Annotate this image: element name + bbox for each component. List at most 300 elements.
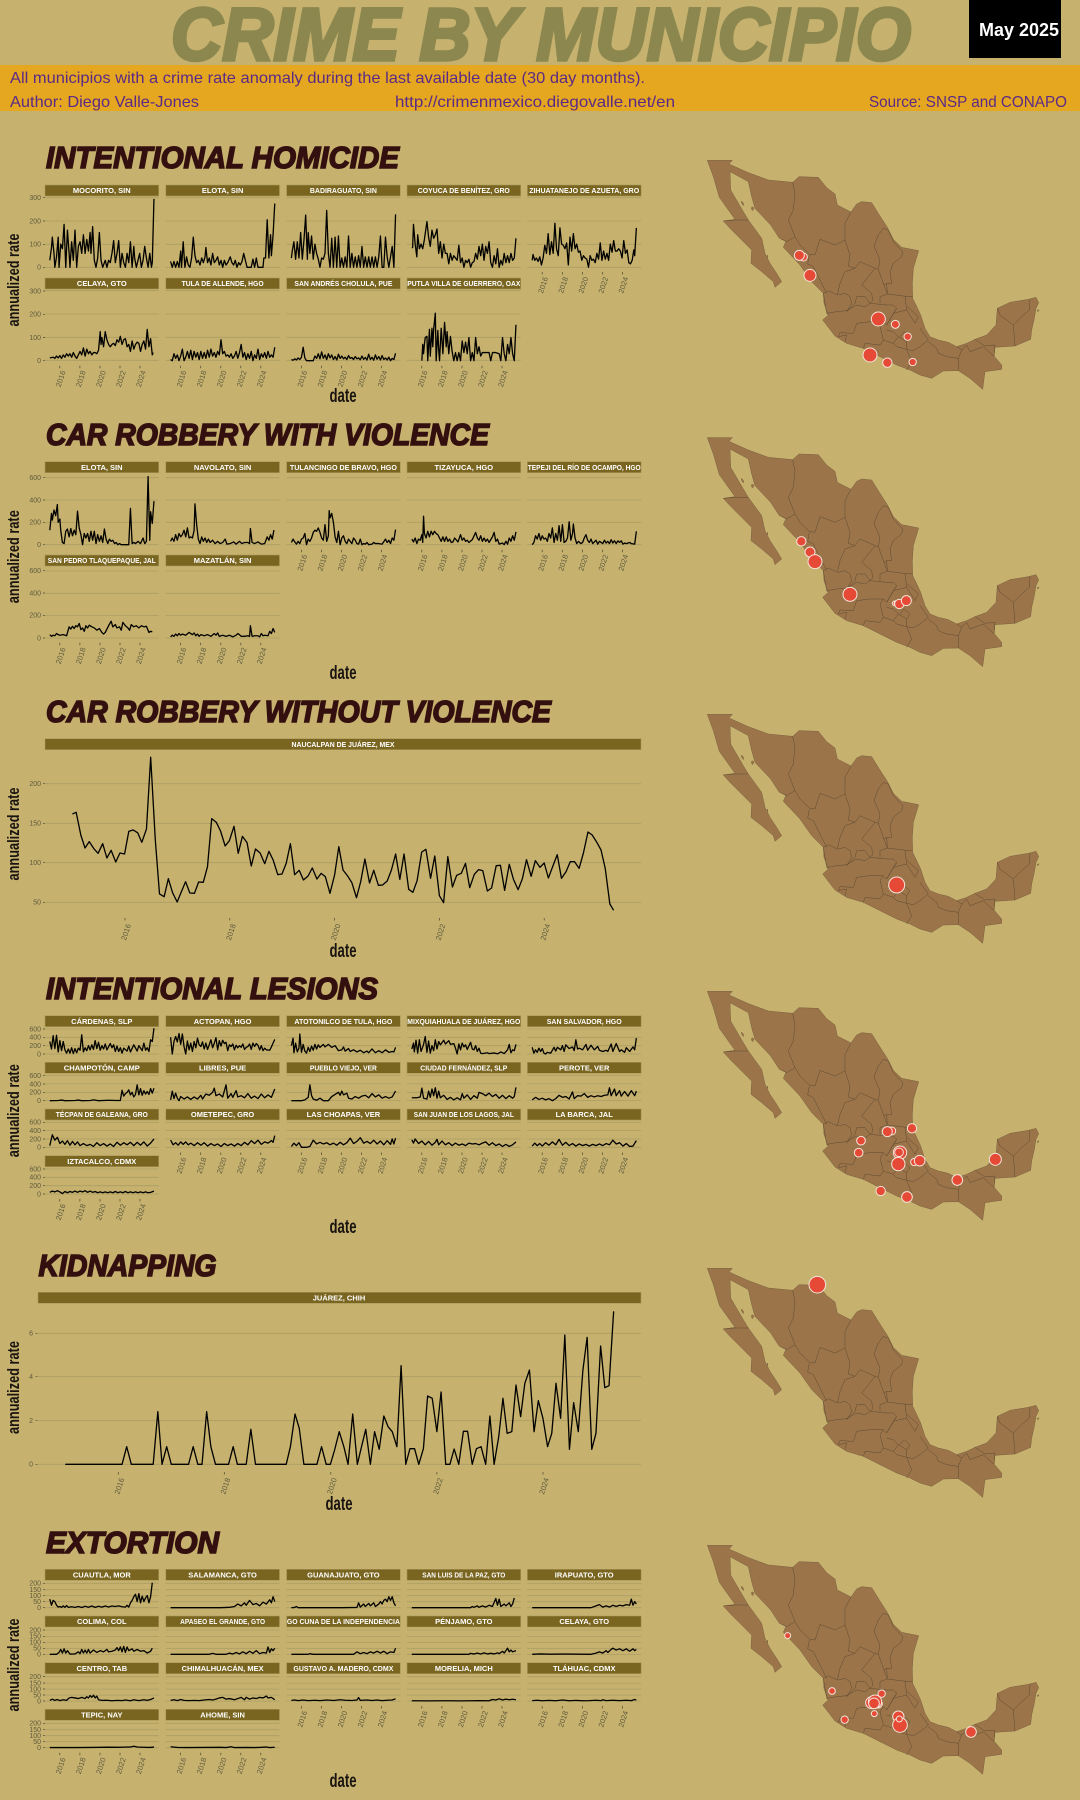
x axes: row 3 free facets: 2022 <box>476 1710 490 1728</box>
y axis labels: 400 <box>29 1128 41 1135</box>
x axis: 2024 <box>134 1203 148 1221</box>
y axis labels: 0 <box>37 1145 41 1152</box>
y axis labels: 100 <box>29 1640 41 1647</box>
panel: extortion <box>4 1525 641 1792</box>
x axis title: date <box>330 941 356 962</box>
facet: Cuautla <box>45 1569 159 1608</box>
facet: Ciudad Fernández <box>407 1062 521 1101</box>
y axis labels: 50 <box>33 1599 41 1606</box>
y axis labels: 150 <box>29 1727 41 1734</box>
x axis: 2022 <box>476 553 490 572</box>
facet: Salamanca <box>166 1569 280 1608</box>
facet: Celaya: CELAYA, GTO <box>77 279 127 288</box>
facet: Ciudad Fernández: CIUDAD FERNÁNDEZ, SLP <box>420 1064 507 1073</box>
facet: Técpan de Galeana <box>45 1109 159 1147</box>
panel: kidnapping <box>4 1248 641 1515</box>
facet: Iztacalco <box>45 1156 159 1221</box>
x axis: 2024 <box>255 646 269 665</box>
panel: car robbery with violence <box>4 417 641 684</box>
facet: Cárdenas: CÁRDENAS, SLP <box>71 1017 132 1026</box>
facet: Juárez <box>29 1292 641 1495</box>
y axis labels: 0 <box>37 1051 41 1058</box>
x axes: row 3 free facets: 2020 <box>576 1156 590 1175</box>
map: car robbery without violence <box>707 714 1039 943</box>
x axis: 2022 <box>114 1203 128 1221</box>
facet: Cuautla: CUAUTLA, MOR <box>73 1571 131 1580</box>
x axes: row 3 free facets: 2024 <box>616 1710 630 1728</box>
facet: San Salvador: SAN SALVADOR, HGO <box>547 1017 622 1026</box>
facet: Ahome: AHOME, SIN <box>200 1711 245 1720</box>
x axis: 2020 <box>576 276 590 294</box>
x axis <box>175 1753 269 1775</box>
facet: Celaya <box>527 1616 641 1654</box>
y axis: annualized rate: annualized rate <box>4 234 23 326</box>
heading: intentional homicide: INTENTIONAL HOMICIDE <box>46 140 400 175</box>
y axis labels <box>29 475 45 642</box>
x axes: row 3 free facets: 2020 <box>456 1156 470 1175</box>
y axis labels <box>29 1331 38 1469</box>
line chart <box>65 1311 614 1464</box>
x axis: 2018 <box>195 369 208 388</box>
x axes: row 3 free facets: 2016 <box>416 1156 430 1175</box>
facet: Chimalhuacán: CHIMALHUACÁN, MEX <box>182 1664 264 1673</box>
x axis: 2016 <box>54 646 68 665</box>
x axis: 2020 <box>336 369 349 388</box>
x axis <box>536 272 630 294</box>
x axis: 2024 <box>538 923 552 941</box>
facet: Perote: PEROTE, VER <box>559 1064 610 1073</box>
facet: Técpan de Galeana: TÉCPAN DE GALEANA, GRO <box>56 1110 148 1119</box>
facet: Dolores Hidalgo Cuna de la Independencia <box>287 1616 400 1654</box>
x axes: row 3 free facets: 2020 <box>336 1710 349 1728</box>
x axis: 2022 <box>235 646 249 665</box>
y axis labels: 300 <box>29 195 41 202</box>
x axis: 2016 <box>295 369 309 388</box>
facet: Elota: ELOTA, SIN <box>81 463 123 472</box>
x axis: 2016 <box>113 1477 126 1495</box>
facet: Zihuatanejo de Azueta <box>527 185 641 294</box>
x axis <box>54 1753 148 1775</box>
facet: Las Choapas: LAS CHOAPAS, VER <box>307 1110 381 1119</box>
y axis labels: 0 <box>37 542 41 549</box>
x axes: row 3 free facets: 2018 <box>436 1156 450 1175</box>
x axis: 2018 <box>219 1477 232 1495</box>
y axis labels: 200 <box>29 1090 41 1097</box>
facet: Mazatlán: MAZATLÁN, SIN <box>194 556 251 565</box>
x axis: 2024 <box>134 646 148 665</box>
y axis labels: 0 <box>37 635 41 642</box>
facet: Putla Villa de Guerrero <box>407 278 521 388</box>
facet: Centro: CENTRO, TAB <box>76 1664 128 1673</box>
x axes: row 3 free facets: 2018 <box>436 1710 450 1728</box>
x axis: 2024 <box>134 1756 148 1775</box>
x axis: 2018 <box>74 1203 88 1221</box>
facet: Gustavo A. Madero: GUSTAVO A. MADERO, CDMX <box>293 1664 393 1673</box>
x axes: row 3 free facets: 2024 <box>496 1710 510 1728</box>
facet: Irapuato: IRAPUATO, GTO <box>555 1571 614 1580</box>
facet: Pueblo Viejo <box>287 1062 400 1101</box>
x axis: 2016 <box>175 646 188 665</box>
facet: Pénjamo <box>407 1616 521 1654</box>
y axis: annualized rate: annualized rate <box>4 1064 23 1157</box>
y axis labels: 100 <box>29 860 41 867</box>
x axes: row 3 free facets: 2024 <box>255 1156 269 1175</box>
facet: Coyuca de Benítez <box>407 185 521 267</box>
x axis: 2016 <box>416 369 430 388</box>
y axis labels: 200 <box>29 613 41 620</box>
x axes: row 3 free facets: 2022 <box>476 1156 490 1175</box>
facet: San Andrés Cholula <box>287 278 400 388</box>
x axis: 2016 <box>175 369 188 388</box>
facet: Tepic: TEPIC, NAY <box>81 1711 123 1720</box>
x axis: 2022 <box>476 369 490 388</box>
facet: San Andrés Cholula: SAN ANDRÉS CHOLULA, PUE <box>294 279 392 288</box>
facet: Las Choapas <box>287 1109 400 1147</box>
facet: Elota: ELOTA, SIN <box>202 186 243 195</box>
y axis labels: 150 <box>29 1587 41 1594</box>
x axis: 2018 <box>316 369 329 388</box>
facet: Cárdenas <box>45 1016 159 1054</box>
x axis: 2022 <box>114 1756 128 1775</box>
facet: Libres <box>166 1062 280 1101</box>
y axis labels: 0 <box>37 1698 41 1705</box>
y axis labels: 200 <box>29 520 41 527</box>
y axis labels <box>29 1581 45 1752</box>
facet: Colima <box>45 1616 159 1654</box>
x axis: 2022 <box>356 553 369 572</box>
x axis <box>113 1472 551 1495</box>
facet: Actopan: ACTOPAN, HGO <box>194 1017 252 1026</box>
y axis labels: 600 <box>29 1120 41 1127</box>
x axes: row 3 free facets: 2020 <box>576 1710 590 1728</box>
x axis <box>119 918 552 941</box>
x axis: 2016 <box>295 553 309 572</box>
y axis labels: 0 <box>37 1745 41 1752</box>
x axis: 2024 <box>616 276 630 294</box>
heading: intentional lesions: INTENTIONAL LESIONS <box>46 971 378 1006</box>
facet: Dolores Hidalgo Cuna de la Independencia: GO CUNA DE LA INDEPENDENCIA <box>287 1617 400 1626</box>
facet: Putla Villa de Guerrero: PUTLA VILLA DE GUERRERO, OAX <box>407 279 520 288</box>
x axis: 2020 <box>336 553 349 572</box>
x axes: row 3 free facets: 2024 <box>496 1156 510 1175</box>
y axis labels: 0 <box>29 1462 33 1469</box>
facet: Champotón: CHAMPOTÓN, CAMP <box>64 1064 140 1073</box>
facet: Tizayuca <box>407 462 521 572</box>
x axes: row 3 free facets: 2016 <box>175 1156 188 1175</box>
x axis: 2022 <box>235 369 249 388</box>
facet: Perote <box>527 1062 641 1101</box>
facet: Colima: COLIMA, COL <box>77 1617 127 1626</box>
x axis <box>416 550 510 572</box>
y axis labels: 50 <box>33 1739 41 1746</box>
facet: Naucalpan de Juárez <box>29 739 641 941</box>
y axis labels: 200 <box>29 1581 41 1588</box>
x axis: 2016 <box>54 369 68 388</box>
facet: Coyuca de Benítez: COYUCA DE BENÍTEZ, GRO <box>418 186 510 195</box>
heading: extortion: EXTORTION <box>46 1525 220 1560</box>
x axis: 2024 <box>134 369 148 388</box>
y axis labels: 200 <box>29 1721 41 1728</box>
x axis: 2016 <box>536 276 550 294</box>
x axis: 2018 <box>556 553 570 572</box>
x axis: 2018 <box>556 276 570 294</box>
y axis labels: 200 <box>29 1043 41 1050</box>
x axis: 2022 <box>114 369 128 388</box>
y axis labels: 150 <box>29 821 41 828</box>
x axis <box>54 643 148 665</box>
panel: intentional lesions <box>4 971 641 1238</box>
facet: San Luis de la Paz: SAN LUIS DE LA PAZ, GTO <box>422 1571 505 1580</box>
x axis: 2016 <box>416 553 430 572</box>
y axis labels: 100 <box>29 242 41 249</box>
facet: Celaya: CELAYA, GTO <box>559 1617 609 1626</box>
y axis labels: 0 <box>37 1652 41 1659</box>
x axes: row 3 free facets: 2020 <box>215 1156 229 1175</box>
x axes: row 3 free facets: 2024 <box>616 1156 630 1175</box>
y axis labels: 400 <box>29 497 41 504</box>
x axis: 2018 <box>195 646 208 665</box>
x axis title: date <box>326 1494 352 1515</box>
facet: Champotón <box>45 1062 159 1101</box>
x axis: 2020 <box>456 553 470 572</box>
facet: Atotonilco de Tula <box>287 1016 400 1054</box>
x axis: 2022 <box>235 1756 249 1775</box>
panel: car robbery without violence <box>4 694 641 962</box>
facet: San Salvador <box>527 1016 641 1054</box>
y axis labels: 100 <box>29 1733 41 1740</box>
x axis: 2020 <box>456 369 470 388</box>
y axis labels: 100 <box>29 1593 41 1600</box>
x axis: 2024 <box>255 1756 269 1775</box>
x axis: 2020 <box>94 369 108 388</box>
x axes: row 3 free facets: 2022 <box>356 1156 369 1175</box>
info banner: http://crimenmexico.diegovalle.net/en <box>395 94 675 111</box>
facet: San Pedro Tlaquepaque <box>45 555 159 665</box>
facet: Tepeji del Río de Ocampo <box>527 462 641 572</box>
facet: San Juan de los Lagos: SAN JUAN DE LOS LAGOS, JAL <box>414 1110 514 1119</box>
x axis: 2022 <box>356 369 369 388</box>
y axis labels <box>29 195 45 365</box>
map: intentional lesions <box>707 991 1039 1220</box>
x axis: 2016 <box>54 1203 68 1221</box>
x axes: row 3 free facets: 2018 <box>556 1710 570 1728</box>
map: car robbery with violence <box>707 438 1039 667</box>
x axis <box>54 366 148 388</box>
x axis: 2024 <box>616 553 630 572</box>
y axis labels <box>29 781 45 907</box>
facet: Navolato: NAVOLATO, SIN <box>194 463 251 472</box>
x axes: row 3 free facets: 2016 <box>536 1710 550 1728</box>
y axis labels: 200 <box>29 781 41 788</box>
facet: Elota <box>166 185 280 267</box>
x axis: 2018 <box>436 553 450 572</box>
facet: Apaseo el Grande: APASEO EL GRANDE, GTO <box>180 1617 265 1626</box>
x axis: 2022 <box>596 276 610 294</box>
y axis labels: 100 <box>29 1686 41 1693</box>
x axis: 2016 <box>54 1756 68 1775</box>
x axis title: date <box>330 1771 356 1792</box>
y axis labels: 200 <box>29 1627 41 1634</box>
facet: Zihuatanejo de Azueta: ZIHUATANEJO DE AZUETA, GRO <box>529 186 639 195</box>
facet: Badiraguato: BADIRAGUATO, SIN <box>310 186 377 195</box>
y axis labels: 600 <box>29 475 41 482</box>
panel: intentional homicide <box>4 140 641 407</box>
facet: Apaseo el Grande <box>166 1616 280 1654</box>
y axis labels: 0 <box>37 1605 41 1612</box>
info banner: Source: SNSP and CONAPO <box>869 94 1067 111</box>
x axes: row 3 free facets: 2022 <box>596 1710 610 1728</box>
x axes: row 3 free facets: 2018 <box>556 1156 570 1175</box>
facet: Navolato <box>166 462 280 545</box>
y axis labels: 50 <box>33 1646 41 1653</box>
y axis labels: 2 <box>29 1418 33 1425</box>
x axis: 2016 <box>536 553 550 572</box>
facet: Guanajuato: GUANAJUATO, GTO <box>307 1571 380 1580</box>
x axis: 2018 <box>74 646 88 665</box>
y axis labels: 100 <box>29 335 41 342</box>
facet: Tizayuca: TIZAYUCA, HGO <box>435 463 493 472</box>
x axes: row 3 free facets <box>175 1152 630 1175</box>
x axes: row 3 free facets: 2022 <box>235 1156 249 1175</box>
y axis labels: 600 <box>29 1166 41 1173</box>
x axis: 2018 <box>316 553 329 572</box>
x axis: 2024 <box>496 369 510 388</box>
facet: Gustavo A. Madero <box>287 1663 400 1701</box>
y axis: annualized rate: annualized rate <box>4 1341 23 1434</box>
facet: Elota <box>45 462 159 545</box>
heading: car robbery without violence: CAR ROBBERY WITHOUT VIOLENCE <box>46 694 552 729</box>
x axes: row 3 free facets: 2020 <box>456 1710 470 1728</box>
facet: La Barca: LA BARCA, JAL <box>556 1110 613 1119</box>
x axis: 2022 <box>114 646 128 665</box>
facet: Guanajuato <box>287 1569 400 1608</box>
facet: La Barca <box>527 1109 641 1147</box>
info banner: All municipios with a crime rate anomaly during the last available date (30 day months). <box>10 70 645 87</box>
y axis: annualized rate: annualized rate <box>4 510 23 603</box>
y axis labels: 50 <box>33 1692 41 1699</box>
y axis labels: 600 <box>29 1073 41 1080</box>
facet: Tláhuac <box>527 1663 641 1701</box>
x axis: 2018 <box>74 1756 88 1775</box>
heading: car robbery with violence: CAR ROBBERY WITH VIOLENCE <box>46 417 490 452</box>
facet: Tláhuac: TLÁHUAC, CDMX <box>553 1664 615 1673</box>
date badge <box>969 0 1061 58</box>
x axis: 2020 <box>94 646 108 665</box>
x axis: 2020 <box>576 553 590 572</box>
facet: Ometepec <box>166 1109 280 1147</box>
x axis: 2020 <box>94 1203 108 1221</box>
date badge: May 2025 <box>979 20 1059 40</box>
facet: Iztacalco: IZTACALCO, CDMX <box>67 1157 136 1166</box>
y axis labels: 0 <box>37 1191 41 1198</box>
facet: Atotonilco de Tula: ATOTONILCO DE TULA, HGO <box>294 1017 393 1026</box>
map: intentional homicide <box>707 160 1039 389</box>
line chart <box>72 757 614 910</box>
x axes: row 3 free facets: 2016 <box>416 1710 430 1728</box>
facet: Mixquiahuala de Juárez: MIXQUIAHUALA DE JUÁREZ, HGO <box>407 1017 520 1026</box>
facet: Badiraguato <box>287 185 400 267</box>
facet: Tula de Allende <box>166 278 280 388</box>
facet: Mixquiahuala de Juárez <box>407 1016 521 1054</box>
facet: Celaya <box>45 278 159 388</box>
y axis labels <box>29 1026 45 1198</box>
x axes: row 3 free facets: 2018 <box>316 1710 329 1728</box>
facet: Naucalpan de Juárez: NAUCALPAN DE JUÁREZ, MEX <box>292 740 394 749</box>
x axis: 2022 <box>434 923 447 941</box>
facet: Pueblo Viejo: PUEBLO VIEJO, VER <box>310 1064 377 1073</box>
facet: Tepic <box>45 1709 159 1775</box>
x axis <box>175 643 269 665</box>
facet: Juárez: JUÁREZ, CHIH <box>313 1294 365 1303</box>
x axes: row 3 free facets: 2020 <box>336 1156 349 1175</box>
y axis labels: 400 <box>29 1081 41 1088</box>
facet: Ahome <box>166 1709 280 1775</box>
x axis: 2024 <box>376 369 389 388</box>
heading: kidnapping: KIDNAPPING <box>38 1248 216 1283</box>
x axis <box>295 550 389 572</box>
facet: San Pedro Tlaquepaque: SAN PEDRO TLAQUEPAQUE, JAL <box>48 556 156 565</box>
x axis: 2022 <box>596 553 610 572</box>
y axis labels: 200 <box>29 1136 41 1143</box>
x axis title: date <box>330 386 356 407</box>
x axes: row 3 free facets: 2022 <box>596 1156 610 1175</box>
y axis labels: 400 <box>29 1035 41 1042</box>
facet: Tula de Allende: TULA DE ALLENDE, HGO <box>182 279 264 288</box>
y axis labels: 200 <box>29 312 41 319</box>
y axis labels: 0 <box>37 265 41 272</box>
y axis labels: 600 <box>29 1026 41 1033</box>
x axis: 2016 <box>175 1756 188 1775</box>
x axes: row 3 free facets: 2016 <box>295 1156 309 1175</box>
x axis <box>416 366 510 388</box>
y axis labels: 50 <box>33 900 41 907</box>
x axis <box>295 366 389 388</box>
facet: Mocorito <box>45 185 159 267</box>
y axis: annualized rate: annualized rate <box>4 788 23 880</box>
y axis labels: 600 <box>29 568 41 575</box>
x axis: 2020 <box>329 923 343 941</box>
y axis labels: 6 <box>29 1331 33 1338</box>
x axis: 2020 <box>215 646 229 665</box>
x axis: 2020 <box>215 369 229 388</box>
facet: Morelia <box>407 1663 521 1701</box>
y axis labels: 150 <box>29 1680 41 1687</box>
x axis: 2024 <box>255 369 269 388</box>
x axis: 2020 <box>215 1756 229 1775</box>
map: extortion <box>707 1545 1039 1774</box>
x axes: row 3 free facets: 2016 <box>536 1156 550 1175</box>
facet: Salamanca: SALAMANCA, GTO <box>188 1571 257 1580</box>
x axis: 2024 <box>537 1477 551 1495</box>
x axes: row 3 free facets <box>295 1706 630 1728</box>
x axis: 2024 <box>376 553 389 572</box>
x axis: 2016 <box>119 923 133 941</box>
y axis: annualized rate: annualized rate <box>4 1618 23 1712</box>
x axis: 2018 <box>224 923 238 941</box>
facet: Tulancingo de Bravo: TULANCINGO DE BRAVO, HGO <box>290 463 397 472</box>
x axis: 2024 <box>496 553 510 572</box>
x axis: 2018 <box>74 369 88 388</box>
x axis title: date <box>330 1217 356 1238</box>
facet: Pénjamo: PÉNJAMO, GTO <box>435 1617 493 1626</box>
x axes: row 3 free facets: 2018 <box>316 1156 329 1175</box>
x axes: row 3 free facets: 2016 <box>295 1710 309 1728</box>
y axis labels: 400 <box>29 1175 41 1182</box>
x axis: 2018 <box>195 1756 208 1775</box>
x axis <box>536 550 630 572</box>
x axis <box>54 1199 148 1221</box>
facet: San Luis de la Paz <box>407 1569 521 1608</box>
